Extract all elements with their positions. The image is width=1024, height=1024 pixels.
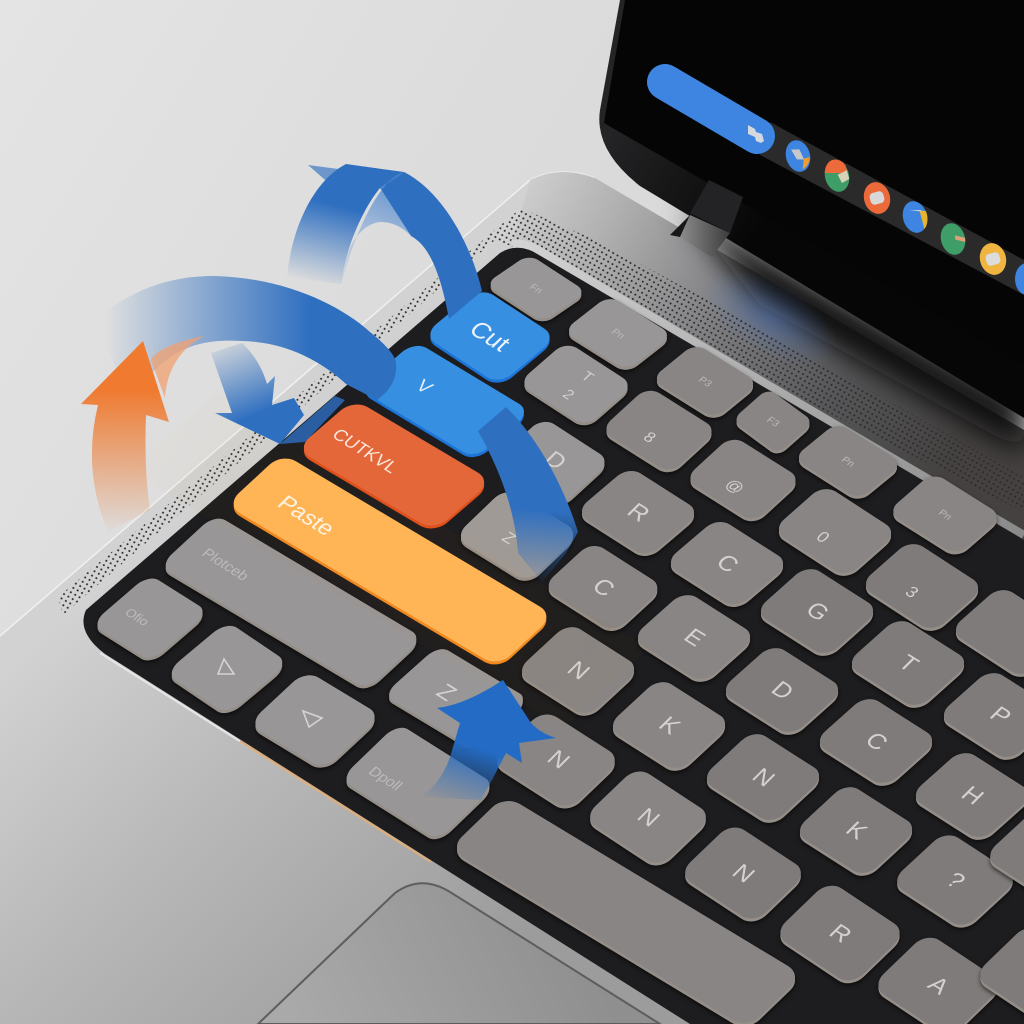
key: C right: C — [859, 728, 893, 756]
key: G: G — [800, 597, 835, 626]
key: 2: T — [577, 368, 597, 385]
key: Z: Z — [431, 679, 462, 706]
key: D: D — [538, 447, 572, 475]
key: H: H — [955, 782, 989, 810]
key: F3: F3 — [764, 415, 782, 429]
key: Ctrl — [91, 574, 209, 662]
top deck behind keyboard — [510, 172, 1024, 548]
dock icon: blue — [782, 137, 814, 175]
dock icon: blue and yellow — [899, 198, 931, 236]
speaker grille dots — [58, 208, 1024, 615]
dock icon: green and red — [821, 157, 853, 195]
key: R bottom — [773, 880, 907, 986]
key: corner partial — [973, 922, 1024, 1024]
key: F1: Pn — [609, 327, 627, 341]
key: N bottom two: N — [631, 804, 665, 832]
key: under arrow — [454, 487, 580, 583]
trackpad — [258, 883, 660, 1024]
screen display area — [604, 0, 1024, 365]
key: E — [631, 590, 757, 684]
hinge — [670, 180, 743, 257]
key: V blue — [359, 341, 531, 459]
spacebar — [449, 795, 803, 1024]
key: N middle — [700, 729, 826, 825]
key: T — [845, 616, 971, 710]
key: N bottom three: N — [726, 860, 760, 888]
key: N row four — [515, 622, 641, 718]
laptop screen — [599, 0, 1024, 418]
keyboard well — [83, 244, 1024, 1024]
key: N bottom one: N — [541, 746, 575, 774]
key: C: C — [710, 550, 744, 578]
key: top function: Fn — [527, 282, 545, 296]
key: F4 — [793, 422, 903, 500]
key: Paste highlighted: Paste — [272, 491, 341, 540]
key: K — [606, 677, 732, 773]
key: F1 — [563, 295, 673, 371]
dock strip — [760, 122, 1024, 295]
key: C right — [813, 694, 939, 788]
key: Dpoll: Dpoll — [365, 764, 406, 794]
arrow: small blue down arrow — [211, 343, 345, 444]
key: 8 — [600, 386, 718, 474]
dock icon: partial blue — [1015, 263, 1024, 295]
key: N bottom two — [583, 766, 713, 868]
key: at sign: @ — [721, 477, 747, 497]
key: V blue: V — [411, 376, 437, 398]
key: Ctrl: Ofio — [122, 605, 153, 628]
key: bottom right — [871, 932, 1005, 1024]
key: 2: 2 — [559, 387, 578, 403]
key: at sign — [684, 435, 802, 523]
key: C lower: C — [586, 574, 620, 602]
key: F5 — [887, 472, 1003, 556]
key: right partial — [949, 585, 1024, 679]
key: 0: 0 — [812, 528, 834, 546]
arrow: orange curved up — [81, 336, 205, 532]
key: wide function — [159, 514, 423, 690]
key: F2: P3 — [696, 375, 714, 390]
key: P — [937, 668, 1024, 762]
arrow: blue down to key — [478, 407, 578, 582]
key: 8: 8 — [639, 430, 659, 446]
key: Z — [383, 645, 529, 749]
key: question — [890, 830, 1020, 930]
key: bottom right: A — [922, 972, 955, 999]
key: top function — [485, 254, 587, 322]
key: F2 — [651, 343, 759, 419]
key: question: ? — [940, 868, 970, 894]
key: C — [664, 517, 790, 609]
key: 2 — [518, 341, 634, 427]
key: G — [754, 564, 880, 658]
key: N middle: N — [746, 764, 780, 792]
dock icon: yellow — [976, 240, 1010, 278]
key: Dpoll — [340, 723, 496, 841]
key: F3 — [732, 388, 814, 454]
key: N bottom three — [678, 822, 808, 924]
key: D lower — [719, 643, 845, 737]
key: Cut blue — [423, 287, 557, 385]
key: wide function: Plotceb — [198, 546, 252, 584]
key: 3 — [859, 539, 985, 633]
arrow: top blue arc — [287, 164, 482, 319]
arrow: large blue arc — [94, 276, 396, 400]
key: CUTKVL orange: CUTKVL — [328, 425, 402, 477]
key: left arrow — [248, 670, 382, 770]
key: D lower: D — [765, 677, 799, 705]
key: R bottom: R — [823, 920, 857, 948]
key: F4: Pn — [839, 455, 857, 469]
key: R: R — [621, 499, 655, 527]
key: Paste highlighted — [226, 453, 554, 667]
key: CUTKVL orange — [296, 399, 492, 531]
key: right edge partial — [983, 805, 1024, 905]
key: E: E — [678, 624, 711, 651]
key: N bottom one — [490, 709, 622, 811]
key: N row four: N — [561, 657, 595, 685]
blue dock pill — [665, 82, 764, 143]
key: C lower — [542, 541, 664, 633]
key: F5: Pn — [936, 508, 954, 522]
key: under arrow: Z — [498, 529, 520, 548]
key: up arrow — [165, 621, 289, 715]
key: R — [575, 466, 701, 558]
screen lid — [599, 0, 1024, 418]
key: K right: K — [840, 817, 873, 844]
arrow: blue up from bottom — [421, 680, 556, 800]
key: K right — [793, 782, 919, 878]
key: Cut blue: Cut — [463, 316, 516, 357]
key: D — [493, 417, 611, 507]
key: T: T — [893, 650, 924, 677]
key: K: K — [653, 712, 686, 739]
dock icon: green — [937, 220, 969, 258]
dock icon: orange — [860, 179, 894, 217]
key: H — [909, 748, 1024, 842]
key: P: P — [984, 702, 1017, 729]
key: 3: 3 — [901, 583, 923, 601]
key: 0 — [772, 484, 898, 578]
